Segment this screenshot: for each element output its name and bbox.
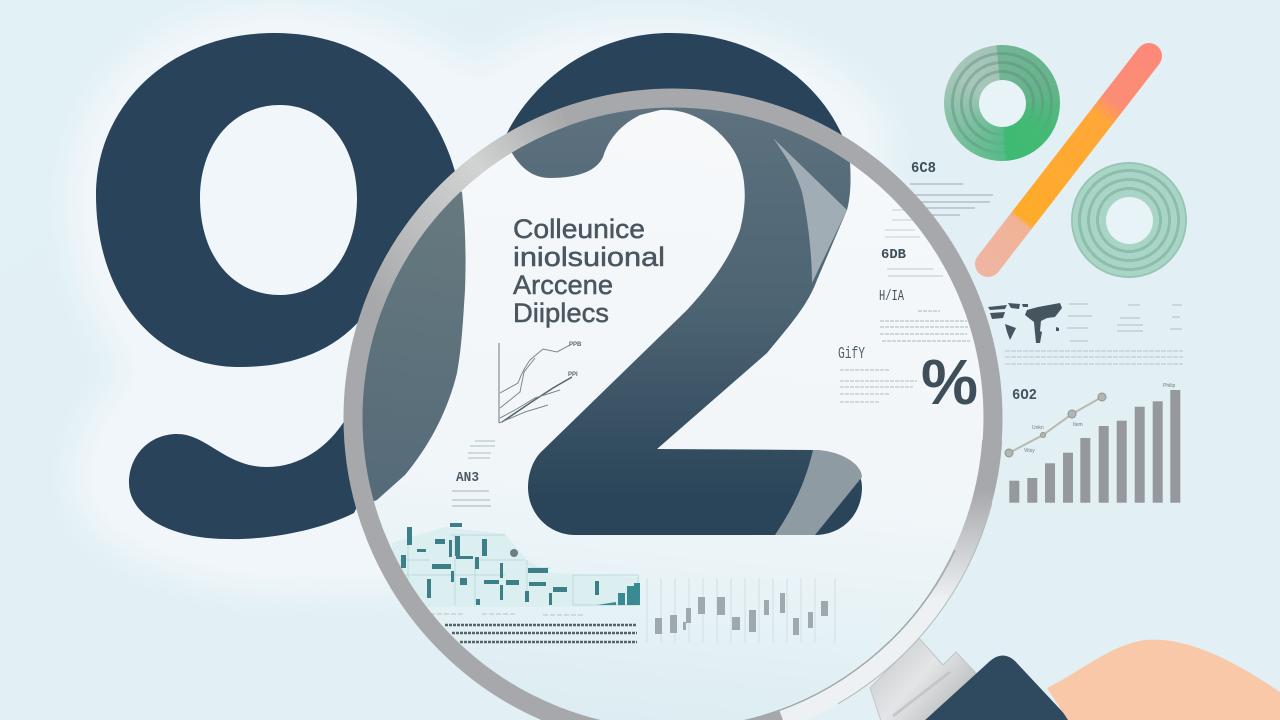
highlight wedge on 2 (773, 138, 847, 283)
numeral 2 top arc outside the lens (506, 33, 842, 220)
ring inner edge lower right (740, 550, 955, 720)
tiny chart labels: Vitsy (1024, 448, 1035, 454)
numeral 9 (96, 33, 460, 539)
hand (1047, 640, 1280, 720)
table caption stubs (430, 614, 583, 615)
table grid (400, 535, 638, 605)
teal table chart (392, 523, 640, 607)
tiny chart labels: Philip (1163, 383, 1175, 389)
lens ring (353, 98, 993, 720)
small percent sign: % (921, 346, 978, 418)
6C8 text lines (910, 184, 993, 215)
soft halo behind the numerals (68, 5, 900, 593)
handle neck (870, 638, 976, 720)
label 6C8: 6C8 (911, 160, 936, 177)
handle neck shading (893, 672, 950, 716)
handle grip (923, 656, 1072, 720)
magnifier handle (870, 638, 1072, 720)
lens glass (351, 96, 995, 720)
trend markers (1005, 393, 1106, 457)
magnified numerals inside the lens (330, 100, 862, 535)
title block in the lens: Colleunice (513, 214, 645, 244)
magnified 9 stroke (362, 191, 466, 502)
gray node (510, 549, 518, 557)
tiny chart labels: Unkn (1032, 425, 1044, 431)
bar and line chart (1005, 383, 1180, 503)
label AN3: AN3 (456, 471, 479, 486)
text under the map (1005, 351, 1183, 364)
ring fade lower right (782, 440, 992, 719)
trend line (1009, 397, 1102, 453)
AN3 text lines (452, 491, 491, 506)
ring outer edge lower right (838, 503, 992, 704)
ring base (353, 98, 993, 720)
candlestick bodies (655, 593, 828, 635)
title block in the lens: Arccene (513, 270, 613, 300)
H/IA text lines (880, 311, 970, 341)
title block in the lens: Diiplecs (513, 298, 609, 328)
label GifY: GifY (838, 345, 865, 364)
large percent slash (988, 56, 1149, 264)
table backdrop (392, 527, 640, 607)
label H/IA: H/IA (879, 288, 904, 305)
chart label 6O2: 6O2 (1012, 387, 1037, 404)
small line chart in the lens (499, 342, 582, 423)
donut: upper percent circle (944, 45, 1060, 161)
magnified 2 (500, 100, 862, 535)
world map (988, 303, 1062, 343)
map legend table (1067, 304, 1182, 341)
bars (1009, 390, 1180, 503)
candlestick grid (647, 578, 835, 643)
6DB text lines (887, 269, 943, 276)
title block in the lens: iniolsuional (513, 242, 665, 272)
text stub above AN3 (468, 441, 495, 458)
tiny chart labels (1024, 383, 1175, 454)
ring highlight upper left (372, 117, 564, 309)
GifY text lines (840, 370, 917, 402)
table cells (401, 523, 599, 605)
small line chart in the lens: PPI (568, 372, 578, 378)
small line chart in the lens: PPB (569, 342, 582, 348)
tiny chart labels: Item (1073, 422, 1083, 428)
highlight band on 2 foot (775, 450, 862, 535)
mini rising bars (597, 583, 640, 605)
candlestick chart (647, 578, 835, 643)
donut: lower percent circle (1071, 162, 1187, 278)
pale text stubs by the ring (885, 210, 920, 237)
title block in the lens (513, 214, 665, 328)
fine print under the table (445, 625, 637, 642)
label 6DB: 6DB (881, 247, 907, 263)
